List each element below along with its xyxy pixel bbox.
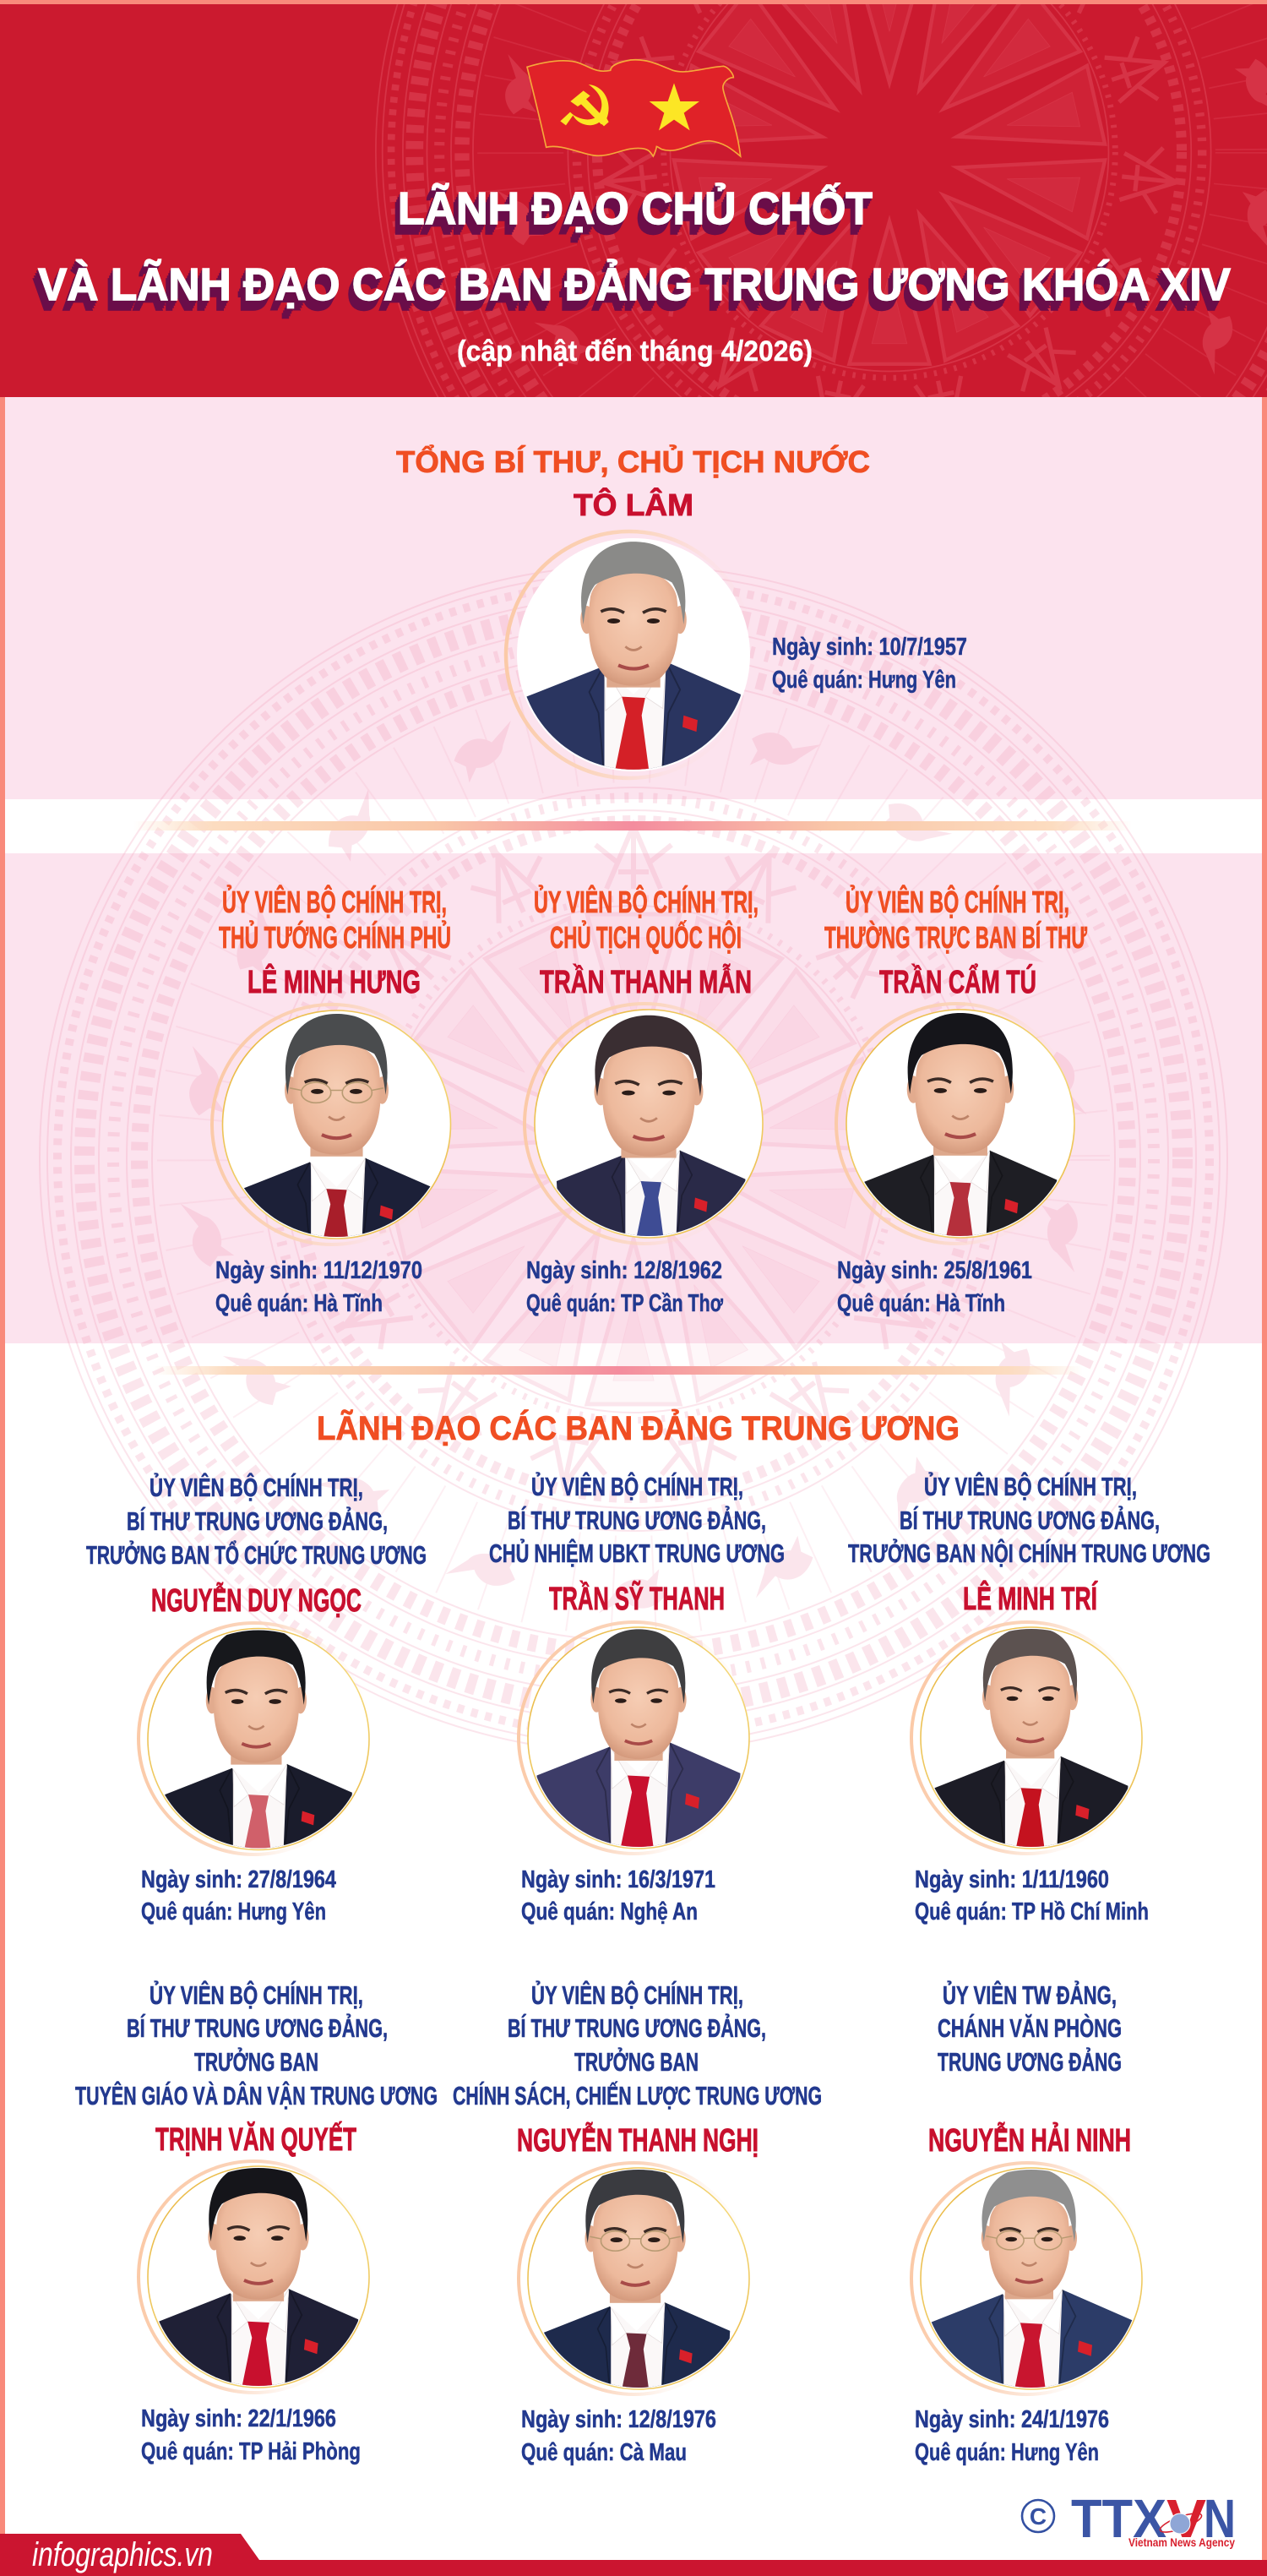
panel: Nguyễn Duy Ngọc: ỦY VIÊN BỘ CHÍNH TRỊ, bbox=[150, 1472, 363, 1502]
portrait bbox=[921, 1627, 1142, 1865]
panel: Trịnh Văn Quyết: TRƯỞNG BAN bbox=[194, 2046, 318, 2077]
panel: Lê Minh Trí: ỦY VIÊN BỘ CHÍNH TRỊ, bbox=[924, 1471, 1137, 1501]
icon: party and national flag bbox=[527, 60, 741, 156]
info bbox=[772, 634, 967, 694]
panel: Nguyễn Duy Ngọc: BÍ THƯ TRUNG ƯƠNG ĐẢNG, bbox=[127, 1506, 388, 1536]
info: Quê quán: Cà Mau bbox=[521, 2439, 687, 2466]
info: Quê quán: Hà Tĩnh bbox=[215, 1290, 383, 1317]
info bbox=[141, 1866, 336, 1925]
name: LÊ MINH HƯNG bbox=[247, 963, 421, 1000]
title: VÀ LÃNH ĐẠO CÁC BAN ĐẢNG TRUNG ƯƠNG KHÓA XIV bbox=[38, 259, 1231, 310]
name: NGUYỄN DUY NGỌC bbox=[151, 1582, 362, 1619]
name: TRỊNH VĂN QUYẾT bbox=[155, 2121, 356, 2158]
panel: Trần Sỹ Thanh: CHỦ NHIỆM UBKT TRUNG ƯƠNG bbox=[489, 1538, 785, 1568]
info: Quê quán: Hà Tĩnh bbox=[837, 1290, 1005, 1317]
portrait bbox=[528, 2165, 749, 2409]
header panel bbox=[0, 0, 1267, 397]
ring bbox=[525, 1004, 764, 1244]
name: TRẦN SỸ THANH bbox=[549, 1580, 725, 1617]
title: LÃNH ĐẠO CHỦ CHỐT bbox=[398, 183, 873, 234]
logo: TTXVN: TTX bbox=[1071, 2488, 1166, 2549]
ring bbox=[139, 1623, 370, 1854]
section heading: LÃNH ĐẠO CÁC BAN ĐẢNG TRUNG ƯƠNG bbox=[317, 1408, 960, 1447]
logo: TTXVN: N bbox=[1204, 2488, 1236, 2549]
panel: Lê Minh Trí bbox=[848, 1471, 1210, 1925]
info bbox=[521, 1866, 715, 1925]
panel: Trần Sỹ Thanh bbox=[489, 1471, 785, 1925]
info: Ngày sinh: 10/7/1957 bbox=[772, 634, 967, 661]
subtitle: (cập nhật đến tháng 4/2026) bbox=[457, 335, 813, 368]
panel: Trần Cẩm Tú: THƯỜNG TRỰC BAN BÍ THƯ bbox=[824, 919, 1087, 955]
ring bbox=[519, 2163, 750, 2394]
info: Ngày sinh: 1/11/1960 bbox=[915, 1866, 1109, 1893]
ring bbox=[506, 531, 753, 778]
portrait bbox=[148, 2163, 369, 2402]
title bbox=[38, 183, 1231, 310]
info: Quê quán: Hưng Yên bbox=[772, 667, 956, 694]
panel: Trịnh Văn Quyết: BÍ THƯ TRUNG ƯƠNG ĐẢNG, bbox=[127, 2013, 388, 2043]
info: Ngày sinh: 12/8/1976 bbox=[521, 2406, 716, 2433]
name: LÊ MINH TRÍ bbox=[963, 1580, 1098, 1617]
portrait bbox=[535, 1010, 763, 1257]
portrait bbox=[223, 1010, 451, 1265]
info: Ngày sinh: 16/3/1971 bbox=[521, 1866, 715, 1893]
panel: Trần Cẩm Tú: ỦY VIÊN BỘ CHÍNH TRỊ, bbox=[846, 884, 1069, 919]
portrait bbox=[148, 1626, 369, 1870]
panel: Lê Minh Trí: BÍ THƯ TRUNG ƯƠNG ĐẢNG, bbox=[900, 1506, 1160, 1535]
ring bbox=[139, 2161, 370, 2393]
page background bands bbox=[0, 397, 1267, 1343]
panel: Trịnh Văn Quyết: ỦY VIÊN BỘ CHÍNH TRỊ, bbox=[150, 1980, 363, 2010]
ring bbox=[212, 1005, 452, 1244]
panel: Nguyễn Hải Ninh: TRUNG ƯƠNG ĐẢNG bbox=[938, 2047, 1122, 2077]
panel: General Secretary bbox=[396, 443, 967, 783]
portrait bbox=[921, 2168, 1142, 2404]
footer site name: infographics.vn bbox=[32, 2536, 213, 2573]
panel: Trần Thanh Mẫn bbox=[525, 884, 764, 1317]
name: TÔ LÂM bbox=[574, 487, 693, 522]
info: Ngày sinh: 27/8/1964 bbox=[141, 1866, 336, 1893]
info: Ngày sinh: 22/1/1966 bbox=[141, 2405, 336, 2432]
panel: Nguyễn Hải Ninh bbox=[911, 1980, 1143, 2466]
ring bbox=[911, 2163, 1143, 2394]
ring bbox=[836, 1004, 1076, 1244]
name: NGUYỄN HẢI NINH bbox=[928, 2121, 1131, 2159]
info: Quê quán: TP Hồ Chí Minh bbox=[915, 1898, 1149, 1925]
name: TRẦN CẨM TÚ bbox=[879, 962, 1036, 1000]
panel: Nguyễn Thanh Nghị: TRƯỞNG BAN bbox=[574, 2046, 699, 2077]
panel: Trần Sỹ Thanh: BÍ THƯ TRUNG ƯƠNG ĐẢNG, bbox=[508, 1506, 766, 1535]
panel: Nguyễn Thanh Nghị: ỦY VIÊN BỘ CHÍNH TRỊ, bbox=[531, 1980, 743, 2010]
panel: Nguyễn Thanh Nghị: CHÍNH SÁCH, CHIẾN LƯỢC TRUNG ƯƠNG bbox=[453, 2081, 822, 2110]
info bbox=[526, 1257, 723, 1317]
panel: Nguyễn Hải Ninh: ỦY VIÊN TW ĐẢNG, bbox=[943, 1980, 1117, 2010]
panel: Nguyễn Thanh Nghị bbox=[453, 1980, 822, 2466]
info bbox=[215, 1257, 422, 1317]
heading: TỔNG BÍ THƯ, CHỦ TỊCH NƯỚC bbox=[396, 443, 870, 479]
icon: copyright: C bbox=[1030, 2503, 1047, 2530]
info: Quê quán: TP Cần Thơ bbox=[526, 1290, 723, 1317]
panel: Trần Thanh Mẫn: CHỦ TỊCH QUỐC HỘI bbox=[550, 919, 742, 955]
icon: copyright bbox=[1022, 2500, 1054, 2532]
portrait bbox=[528, 1627, 749, 1857]
portrait: Tô Lâm bbox=[517, 538, 750, 783]
info: Quê quán: TP Hải Phòng bbox=[141, 2438, 361, 2465]
info: Ngày sinh: 12/8/1962 bbox=[526, 1257, 722, 1284]
info: Quê quán: Hưng Yên bbox=[141, 1898, 326, 1925]
divider bbox=[154, 1366, 1083, 1375]
info bbox=[915, 1866, 1149, 1925]
logo: TTXVN: Vietnam News Agency bbox=[1128, 2536, 1235, 2549]
background pattern: bronze drum bbox=[40, 565, 1227, 1753]
portrait bbox=[846, 1010, 1074, 1260]
panel: Lê Minh Hưng: THỦ TƯỚNG CHÍNH PHỦ bbox=[219, 919, 451, 955]
panel: Lê Minh Hưng bbox=[212, 884, 452, 1317]
panel: Trần Cẩm Tú bbox=[824, 884, 1087, 1317]
logo: TTXVN: V bbox=[1166, 2488, 1206, 2549]
panel: Nguyễn Duy Ngọc bbox=[86, 1472, 427, 1925]
panel: Nguyễn Hải Ninh: CHÁNH VĂN PHÒNG bbox=[938, 2012, 1122, 2043]
info: Quê quán: Nghệ An bbox=[521, 1898, 698, 1925]
info: Ngày sinh: 11/12/1970 bbox=[215, 1257, 422, 1284]
ring bbox=[519, 1622, 750, 1854]
info bbox=[521, 2406, 716, 2466]
panel: Trần Thanh Mẫn: ỦY VIÊN BỘ CHÍNH TRỊ, bbox=[534, 884, 759, 919]
panel: Nguyễn Duy Ngọc: TRƯỞNG BAN TỔ CHỨC TRUNG ƯƠNG bbox=[86, 1539, 427, 1570]
footer bar bbox=[0, 2534, 1267, 2576]
panel: Nguyễn Thanh Nghị: BÍ THƯ TRUNG ƯƠNG ĐẢNG, bbox=[508, 2013, 766, 2043]
info bbox=[915, 2406, 1109, 2466]
panel: Trịnh Văn Quyết bbox=[75, 1980, 438, 2465]
name: TRẦN THANH MẪN bbox=[540, 963, 752, 1000]
ring bbox=[911, 1622, 1143, 1854]
panel: Trịnh Văn Quyết: TUYÊN GIÁO VÀ DÂN VẬN TRUNG ƯƠNG bbox=[75, 2080, 438, 2110]
info bbox=[141, 2405, 361, 2465]
panel: Trần Sỹ Thanh: ỦY VIÊN BỘ CHÍNH TRỊ, bbox=[531, 1471, 743, 1501]
divider bbox=[133, 821, 1132, 831]
info: Ngày sinh: 25/8/1961 bbox=[837, 1257, 1032, 1284]
info: Ngày sinh: 24/1/1976 bbox=[915, 2406, 1109, 2433]
name: NGUYỄN THANH NGHỊ bbox=[517, 2121, 759, 2159]
logo: TTXVN bbox=[1071, 2488, 1236, 2549]
info bbox=[837, 1257, 1032, 1317]
info: Quê quán: Hưng Yên bbox=[915, 2439, 1099, 2466]
panel: Lê Minh Hưng: ỦY VIÊN BỘ CHÍNH TRỊ, bbox=[222, 884, 447, 919]
